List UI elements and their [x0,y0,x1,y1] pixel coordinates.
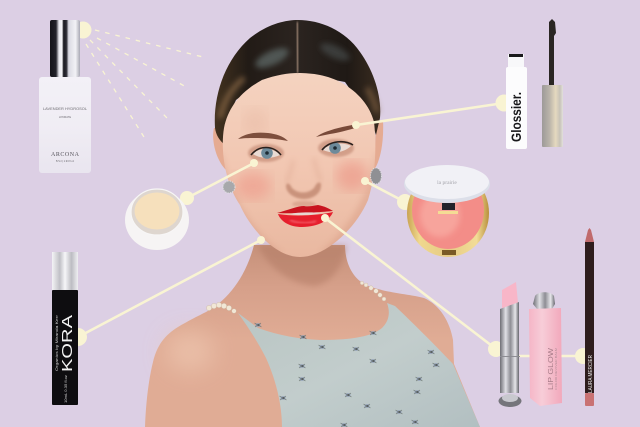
pearl straps [206,281,386,313]
lips [277,205,333,227]
earrings [223,168,382,193]
lid text: la prairie [437,180,457,186]
bottle label: ARCONA [51,152,80,158]
blush pan [412,171,484,249]
line: between lip products [500,355,582,357]
cap [50,20,80,77]
product: Kora roll-on: Organics by Miranda Kerr [55,314,59,371]
bottle label [43,107,87,163]
nose [286,158,321,207]
face shading [224,116,374,248]
line: brow to Glossier [356,103,504,125]
ears [213,120,383,170]
product: Dior lip glow: COLOR REVIVER BALM [554,347,558,390]
hinge [442,203,455,210]
bullet [502,282,518,309]
product: blush compact [404,165,490,257]
shoulder highlight [166,332,214,372]
tube [500,302,519,393]
product: lip pencil [585,228,594,406]
product: Kora roll-on [52,252,78,405]
product: concealer jar [125,189,189,250]
line: lips to lip products [325,218,496,349]
brows [238,133,288,141]
bottle [39,77,91,173]
product: pink lipstick [498,282,522,407]
tip [585,228,594,242]
tube [506,67,527,149]
product: Kora roll-on: 10mL 0.35 fl.oz [64,375,68,403]
brand: Glossier. [509,92,524,142]
product: Arcona hydrosol [39,20,91,173]
jar rim [131,189,183,235]
label: LAURA MERCIER [588,355,594,393]
line: neck to Kora [80,240,261,336]
base [498,395,522,407]
connector lines [80,103,582,356]
cream [134,192,180,230]
hair part [297,22,298,73]
hair shine [220,40,377,118]
dress [238,303,480,427]
product: Glossier tube and wand [506,19,563,149]
jar base [125,190,189,250]
neck [508,54,524,68]
line: under-eye to concealer [187,163,254,198]
body [529,308,562,406]
end cap [585,393,594,406]
dress embellishments [254,323,440,427]
label: LIP GLOW [548,348,555,390]
wand cap [542,85,563,147]
cap [52,252,78,290]
cap [533,292,555,309]
bottle label: LAVENDER HYDROSOL [43,107,87,111]
product: Dior lip glow [529,292,562,406]
body [52,290,78,405]
lid [404,165,490,203]
bottle label: 57ml | 1.93 fl oz [56,159,75,163]
bottle label: HYDRATE [59,115,71,119]
wand [549,19,556,85]
shoulders and neck [145,245,480,427]
connector dots [69,22,591,364]
neck shadow [258,245,347,286]
model portrait [145,20,480,427]
line: cheek to blush [365,181,407,203]
gold base [407,169,489,257]
eyes [248,139,354,162]
hair [215,20,380,145]
brand: KORA [59,315,76,372]
barrel [585,242,594,393]
face [223,73,375,257]
spray rays [86,30,203,137]
